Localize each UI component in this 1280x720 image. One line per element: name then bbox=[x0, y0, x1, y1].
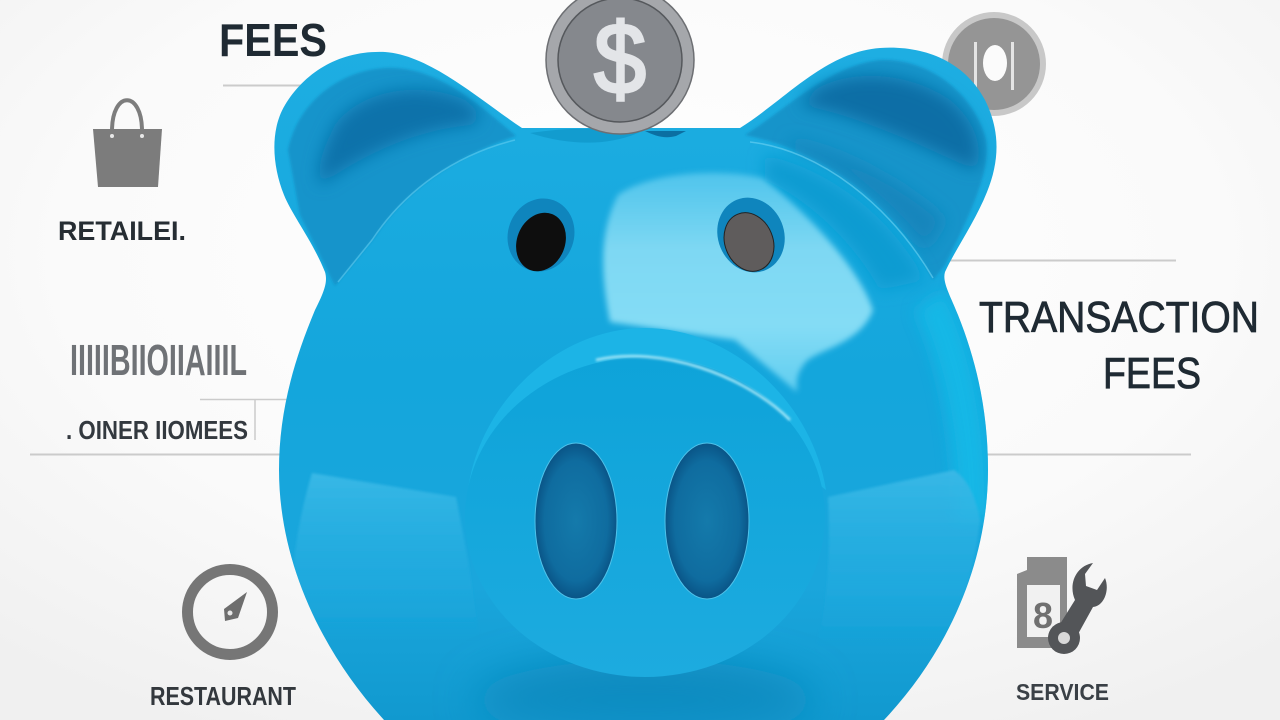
left cheek patch bbox=[294, 472, 468, 609]
divider lines bbox=[30, 86, 1191, 454]
left nostril bbox=[535, 443, 617, 599]
right nostril bbox=[665, 443, 749, 599]
left eye bbox=[508, 198, 574, 272]
heading: transaction fees: FEES bbox=[1103, 349, 1201, 398]
right edge glow bbox=[915, 290, 990, 520]
right ear dark band bbox=[800, 76, 979, 170]
left ear base bbox=[288, 68, 516, 286]
ear highlight lines bbox=[338, 140, 933, 282]
shadow under snout bbox=[475, 660, 815, 720]
label: service: SERVICE bbox=[1016, 679, 1109, 705]
left ear dark band bbox=[319, 90, 479, 185]
label: garbled heading: IIIIIBIIOIIAIIIL bbox=[70, 336, 247, 385]
label: garbled subheading: . OINER IIOMEES bbox=[66, 415, 248, 445]
heading: transaction fees bbox=[979, 293, 1259, 398]
heading: fees: FEES bbox=[219, 14, 327, 66]
icon: plate coin bbox=[942, 12, 1046, 116]
forehead highlight bbox=[603, 173, 873, 392]
label: retailer: RETAILEI. bbox=[58, 216, 186, 246]
right ear lower dark band bbox=[793, 150, 938, 240]
icon: shopping bag bbox=[93, 100, 162, 187]
snout bbox=[465, 328, 826, 677]
right cheek patch bbox=[828, 470, 980, 574]
shade below right ear bbox=[765, 155, 925, 290]
icon: service bottle and wrench: 8 bbox=[1033, 595, 1053, 636]
icon: gauge bbox=[188, 570, 272, 654]
coin slot bbox=[530, 129, 686, 143]
icon: dollar coin: $ bbox=[594, 3, 646, 115]
label: restaurant: RESTAURANT bbox=[150, 681, 296, 711]
icon: service bottle and wrench bbox=[1017, 557, 1107, 654]
right eye bbox=[717, 198, 785, 272]
right ear base bbox=[745, 60, 987, 280]
icon: dollar coin bbox=[546, 0, 694, 134]
piggy bank bbox=[260, 40, 1010, 720]
pig body bbox=[260, 40, 1010, 720]
